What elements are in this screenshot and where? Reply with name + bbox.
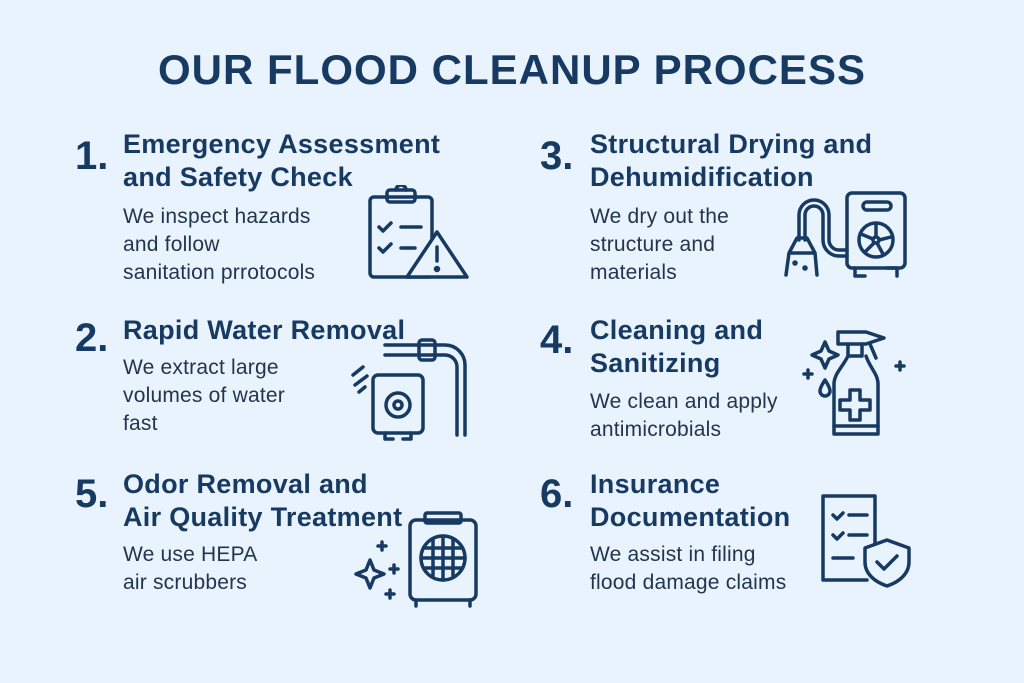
heading 1 [123, 129, 440, 192]
step 1 [75, 129, 440, 284]
icon: water extractor [351, 338, 467, 441]
icon: spray bottle [802, 330, 906, 436]
icon: document shield [821, 494, 911, 588]
body 5 [123, 543, 258, 594]
heading 3: Structural Drying and [590, 129, 872, 159]
icon: dehumidifier [784, 191, 907, 278]
body 5: We use HEPA [123, 543, 257, 566]
step 5 [75, 469, 402, 594]
number 6: 6. [540, 472, 573, 516]
heading 6: Documentation [590, 502, 790, 532]
heading 6 [590, 469, 790, 532]
body 6: We assist in filing [590, 543, 756, 566]
body 4: antimicrobials [590, 418, 721, 441]
number 5: 5. [75, 472, 108, 516]
number 1: 1. [75, 134, 108, 178]
body 3: We dry out the [590, 205, 729, 228]
heading 3 [590, 129, 872, 192]
number 2: 2. [75, 316, 108, 360]
body 2 [123, 356, 285, 435]
body 6 [590, 543, 786, 594]
body 3: materials [590, 261, 677, 284]
heading 1: Emergency Assessment [123, 129, 440, 159]
body 2: volumes of water [123, 384, 285, 407]
heading 4: Cleaning and [590, 315, 763, 345]
body 2: We extract large [123, 356, 279, 379]
heading 5: Air Quality Treatment [123, 502, 402, 532]
step 4 [540, 315, 778, 441]
number 3: 3. [540, 134, 573, 178]
body 5: air scrubbers [123, 571, 247, 594]
step 3 [540, 129, 872, 284]
body 1: and follow [123, 233, 220, 256]
heading 2: Rapid Water Removal [123, 315, 405, 345]
body 3: structure and [590, 233, 715, 256]
heading 6: Insurance [590, 469, 720, 499]
body 4 [590, 390, 778, 441]
step 2 [75, 315, 405, 435]
heading 4 [590, 315, 763, 378]
body 1 [123, 205, 315, 284]
heading 3: Dehumidification [590, 162, 814, 192]
number 4: 4. [540, 318, 573, 362]
body 1: sanitation prrotocols [123, 261, 315, 284]
body 2: fast [123, 412, 158, 435]
heading 1: and Safety Check [123, 162, 353, 192]
title: OUR FLOOD CLEANUP PROCESS [158, 46, 866, 93]
body 1: We inspect hazards [123, 205, 311, 228]
icon: air scrubber [354, 511, 478, 608]
step 6 [540, 469, 790, 594]
body 3 [590, 205, 729, 284]
body 4: We clean and apply [590, 390, 778, 413]
body 6: flood damage claims [590, 571, 786, 594]
heading 5 [123, 469, 402, 532]
icon: clipboard warning [368, 185, 469, 279]
heading 4: Sanitizing [590, 348, 720, 378]
heading 5: Odor Removal and [123, 469, 368, 499]
